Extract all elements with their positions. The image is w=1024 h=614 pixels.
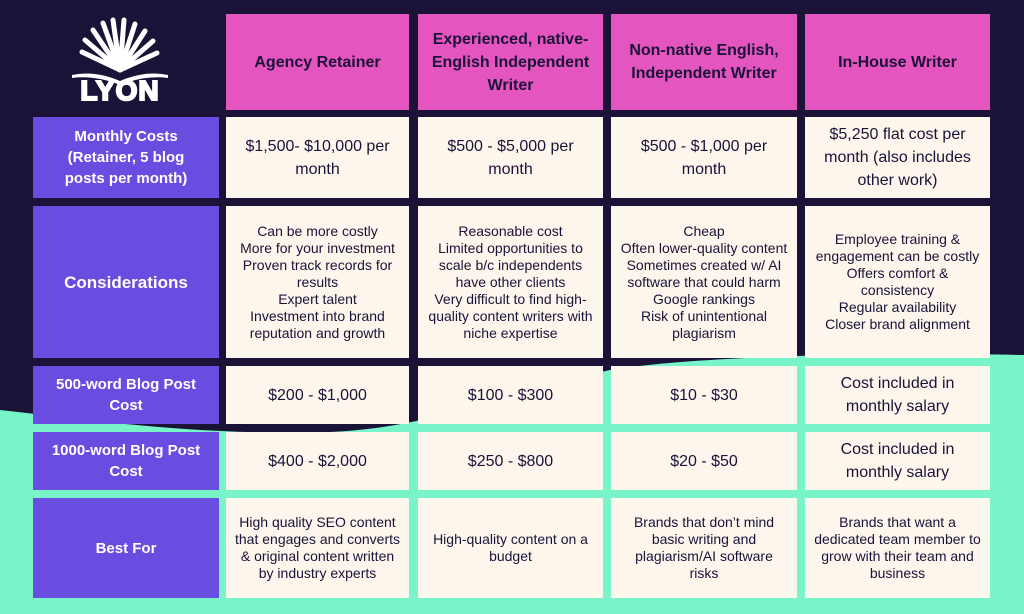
text: Brands that want a dedicated team member to grow with their team and business <box>814 514 981 581</box>
text: $1,500- $10,000 per month <box>245 138 390 178</box>
text: $20 - $50 <box>670 452 738 470</box>
text: Proven track records for results <box>243 256 392 290</box>
header: non-native: Non-native English, Independent Writer <box>629 42 779 82</box>
text: Very difficult to find high-quality content writers with niche expertise <box>428 290 593 340</box>
row: best for <box>33 498 219 598</box>
text: Reasonable cost <box>458 222 563 238</box>
text: Investment into brand reputation and growth <box>250 308 385 340</box>
text: Cost included in monthly salary <box>841 375 954 415</box>
text: Sometimes created w/ AI software that could harm Google rankings <box>627 256 781 306</box>
row: monthly costs: Monthly Costs (Retainer, 5 blog posts per month) <box>65 128 187 187</box>
text: Often lower-quality content <box>621 240 787 256</box>
text: $5,250 flat cost per month (also includes other work) <box>824 126 971 189</box>
text: Cheap <box>683 222 725 238</box>
text: Offers comfort & consistency <box>847 265 948 298</box>
header: non-native <box>611 14 797 110</box>
text: Cost included in monthly salary <box>841 441 954 481</box>
text: $500 - $1,000 per month <box>641 138 767 178</box>
text: $250 - $800 <box>468 452 553 470</box>
text: Expert talent <box>278 290 357 306</box>
header: in-house <box>805 14 990 110</box>
text: Risk of unintentional plagiarism <box>641 308 767 340</box>
text: $10 - $30 <box>670 386 738 404</box>
text: $400 - $2,000 <box>268 452 367 470</box>
text: $500 - $5,000 per month <box>447 138 574 178</box>
header: in-house: In-House Writer <box>838 54 957 70</box>
logo <box>72 18 168 105</box>
text: $100 - $300 <box>468 386 553 404</box>
text: Limited opportunities to scale b/c independents have other clients <box>438 240 583 290</box>
text: Regular availability <box>839 299 956 315</box>
row: 500-word: 500-word Blog Post Cost <box>56 376 196 414</box>
text: More for your investment <box>240 240 395 256</box>
row: considerations <box>33 206 219 358</box>
text: Closer brand alignment <box>825 316 970 332</box>
row: 1000-word: 1000-word Blog Post Cost <box>52 442 200 480</box>
text: Brands that don’t mind basic writing and plagiarism/AI software risks <box>634 514 774 581</box>
row: best for: Best For <box>96 540 156 556</box>
row: 1000-word <box>33 432 219 490</box>
text: $200 - $1,000 <box>268 386 367 404</box>
row: 500-word <box>33 366 219 424</box>
text: Employee training & engagement can be costly <box>816 231 979 264</box>
row: monthly costs <box>33 117 219 198</box>
header: native independent <box>418 14 603 110</box>
header: native independent: Experienced, native-English Independent Writer <box>432 30 589 94</box>
text: Can be more costly <box>257 222 378 238</box>
header: Agency Retainer <box>226 14 409 110</box>
text: High quality SEO content that engages and converts & original content written by industry experts <box>235 514 400 581</box>
header: Agency Retainer: Agency Retainer <box>254 54 381 70</box>
text: High-quality content on a budget <box>433 531 588 564</box>
row: considerations: Considerations <box>64 272 188 292</box>
